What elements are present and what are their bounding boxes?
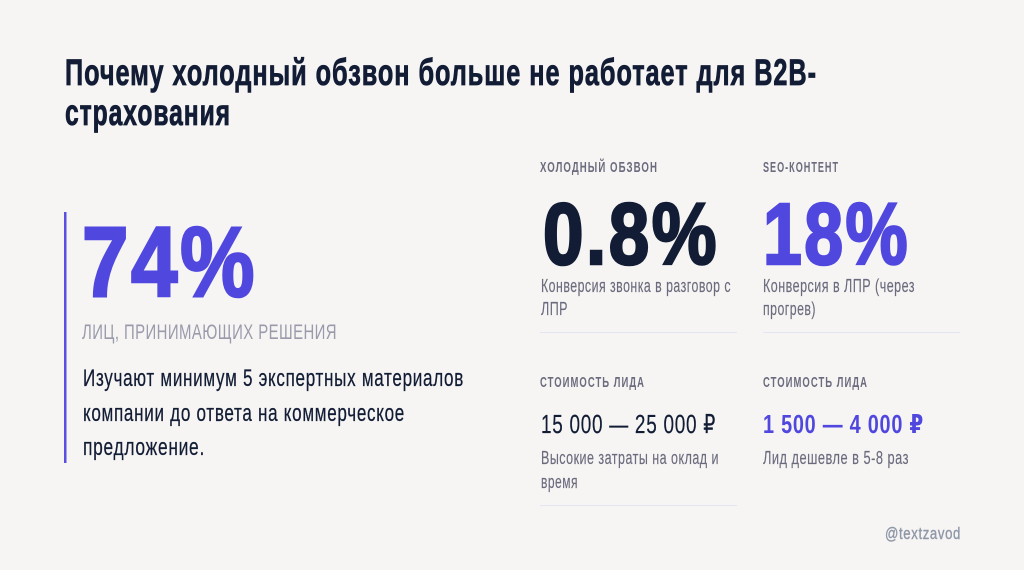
title: страхования xyxy=(65,92,231,133)
label: СТОИМОСТЬ ЛИДА xyxy=(540,375,645,391)
description xyxy=(83,365,464,461)
description xyxy=(541,448,719,492)
panel: cold call lead cost xyxy=(540,375,737,506)
price range: 15 000 — 25 000 ₽ xyxy=(541,409,716,439)
label: СТОИМОСТЬ ЛИДА xyxy=(763,375,868,391)
panel: key statistic xyxy=(64,206,464,463)
description xyxy=(763,276,915,319)
description: компании до ответа на коммерческое xyxy=(83,400,405,427)
label: SEO-КОНТЕНТ xyxy=(763,160,839,176)
watermark: @textzavod xyxy=(885,524,961,543)
description: время xyxy=(541,472,578,492)
description: предложение. xyxy=(83,434,205,461)
panel: cold call conversion xyxy=(540,158,737,333)
description: Конверсия в ЛПР (через xyxy=(763,276,915,296)
label: ХОЛОДНЫЙ ОБЗВОН xyxy=(540,158,658,176)
panel: SEO lead cost xyxy=(763,375,924,468)
description: Высокие затраты на оклад и xyxy=(541,448,719,468)
title xyxy=(65,52,817,133)
description xyxy=(541,276,731,319)
accent bar xyxy=(64,212,66,463)
description: ЛПР xyxy=(541,299,568,319)
price range: 1 500 — 4 000 ₽ xyxy=(763,409,924,439)
subtitle: ЛИЦ, ПРИНИМАЮЩИХ РЕШЕНИЯ xyxy=(82,321,337,344)
description: Лид дешевле в 5-8 раз xyxy=(763,448,909,468)
description: Изучают минимум 5 экспертных материалов xyxy=(83,365,464,392)
big number 74%: 74% xyxy=(82,206,257,317)
big number 18%: 18% xyxy=(763,186,910,283)
panel: SEO content conversion xyxy=(763,160,960,333)
description: Конверсия звонка в разговор с xyxy=(541,276,731,296)
description: прогрев) xyxy=(763,299,816,319)
big number 0.8%: 0.8% xyxy=(543,186,719,283)
